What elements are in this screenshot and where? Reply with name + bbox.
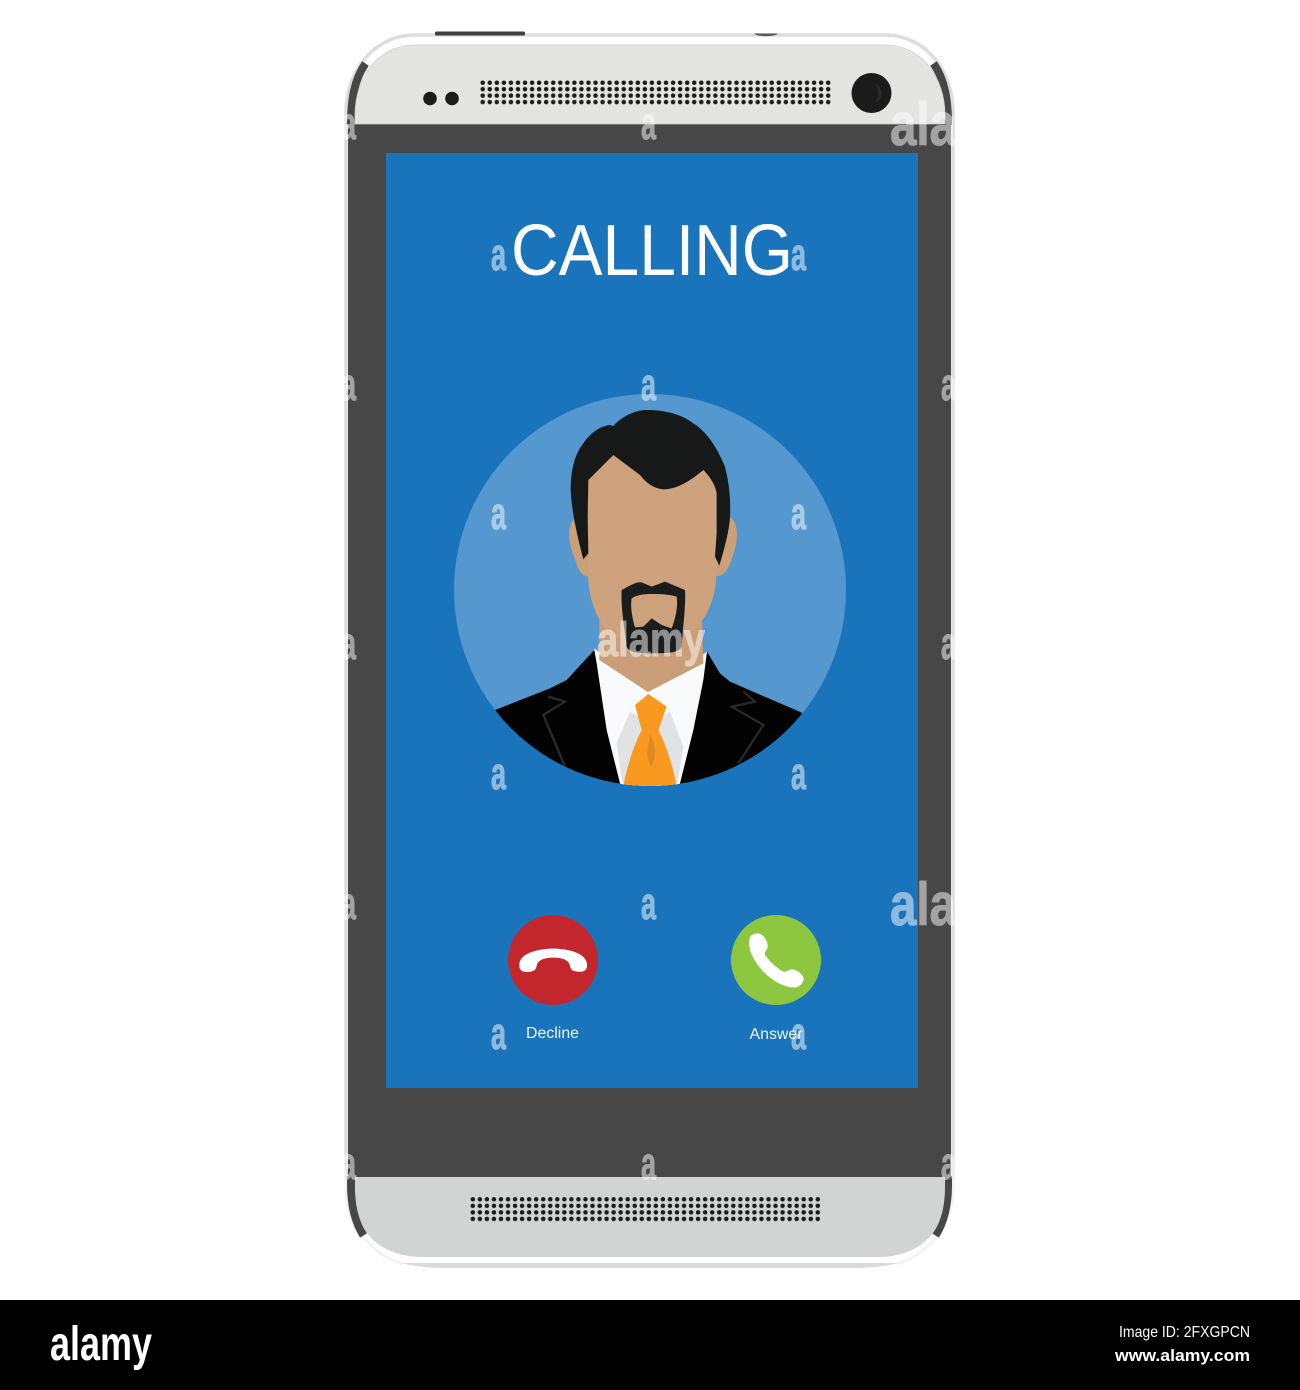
front sensors bbox=[423, 92, 459, 105]
bottom silver panel bbox=[355, 1177, 945, 1257]
jacket lapels bbox=[543, 692, 763, 767]
stock watermarks: ala bbox=[890, 871, 956, 938]
stock watermarks: a bbox=[941, 359, 957, 410]
smartphone bbox=[346, 32, 953, 1268]
stock watermarks: a bbox=[791, 488, 807, 539]
website: www.alamy.com bbox=[1114, 1346, 1250, 1365]
ears bbox=[569, 517, 737, 577]
corner trim: upper right bbox=[934, 64, 948, 125]
stock watermarks: a bbox=[791, 229, 807, 280]
goatee bbox=[622, 582, 685, 653]
image id: Image ID: 2FXGPCN bbox=[1119, 1324, 1250, 1341]
shirt collar shadow bbox=[617, 712, 683, 788]
stock watermarks: a bbox=[491, 1008, 507, 1059]
icon: hang-up handset bbox=[519, 949, 587, 972]
top power button bbox=[754, 34, 778, 36]
earpiece speaker grille bbox=[479, 80, 832, 105]
corner trim: upper left bbox=[351, 64, 366, 125]
icon: answer handset bbox=[749, 933, 804, 988]
stock watermarks: a bbox=[341, 359, 357, 410]
answer button bbox=[731, 915, 821, 1043]
corner trim: lower right bbox=[936, 1176, 948, 1236]
caller avatar bbox=[454, 394, 846, 790]
suit jacket bbox=[495, 650, 802, 784]
casing outline: lower sides bbox=[346, 1175, 953, 1264]
stock watermarks: a bbox=[341, 98, 357, 149]
stock watermarks: a bbox=[791, 748, 807, 799]
stock watermarks: a bbox=[341, 878, 357, 929]
stock watermarks: ala bbox=[890, 91, 956, 158]
answer label: Answer bbox=[750, 1026, 802, 1043]
footer background bbox=[0, 1300, 1300, 1390]
stock watermarks: a bbox=[641, 359, 657, 410]
stock watermarks: a bbox=[941, 618, 957, 669]
alamy logo: alamy bbox=[50, 1318, 152, 1371]
stock watermarks: a bbox=[341, 1138, 357, 1189]
stock watermarks bbox=[341, 91, 957, 1189]
stock watermarks: a bbox=[641, 1138, 657, 1189]
avatar background circle bbox=[454, 394, 846, 786]
casing outline: top and sides bbox=[346, 35, 953, 1180]
hair bbox=[571, 410, 730, 566]
stock watermarks: alamy bbox=[597, 614, 705, 667]
stock watermarks: a bbox=[641, 878, 657, 929]
footer bar bbox=[0, 1300, 1300, 1390]
stock watermarks: a bbox=[941, 1138, 957, 1189]
phone screen bbox=[386, 153, 918, 1088]
stock watermarks: a bbox=[491, 229, 507, 280]
corner trim: lower left bbox=[351, 1176, 364, 1236]
decline label: Decline bbox=[526, 1025, 579, 1042]
stock watermarks: a bbox=[491, 748, 507, 799]
stock watermarks: a bbox=[641, 98, 657, 149]
top volume button bbox=[435, 32, 525, 36]
caller portrait bbox=[483, 410, 817, 790]
face bbox=[588, 455, 717, 620]
decline circle bbox=[508, 915, 598, 1005]
bottom speaker grille bbox=[469, 1196, 821, 1222]
answer circle bbox=[731, 915, 821, 1005]
tie fold bbox=[647, 733, 655, 767]
shirt bbox=[592, 648, 710, 790]
stock watermarks: a bbox=[341, 618, 357, 669]
casing bottom edge bbox=[400, 1263, 898, 1268]
heading: calling: CALLING bbox=[511, 211, 793, 291]
orange tie bbox=[623, 694, 677, 790]
top silver panel bbox=[355, 45, 945, 124]
stock watermarks: a bbox=[791, 1008, 807, 1059]
phone front bezel bbox=[348, 124, 951, 1177]
stock watermarks: a bbox=[491, 488, 507, 539]
decline button bbox=[508, 915, 598, 1042]
front camera bbox=[852, 73, 892, 113]
neck bbox=[599, 619, 704, 692]
